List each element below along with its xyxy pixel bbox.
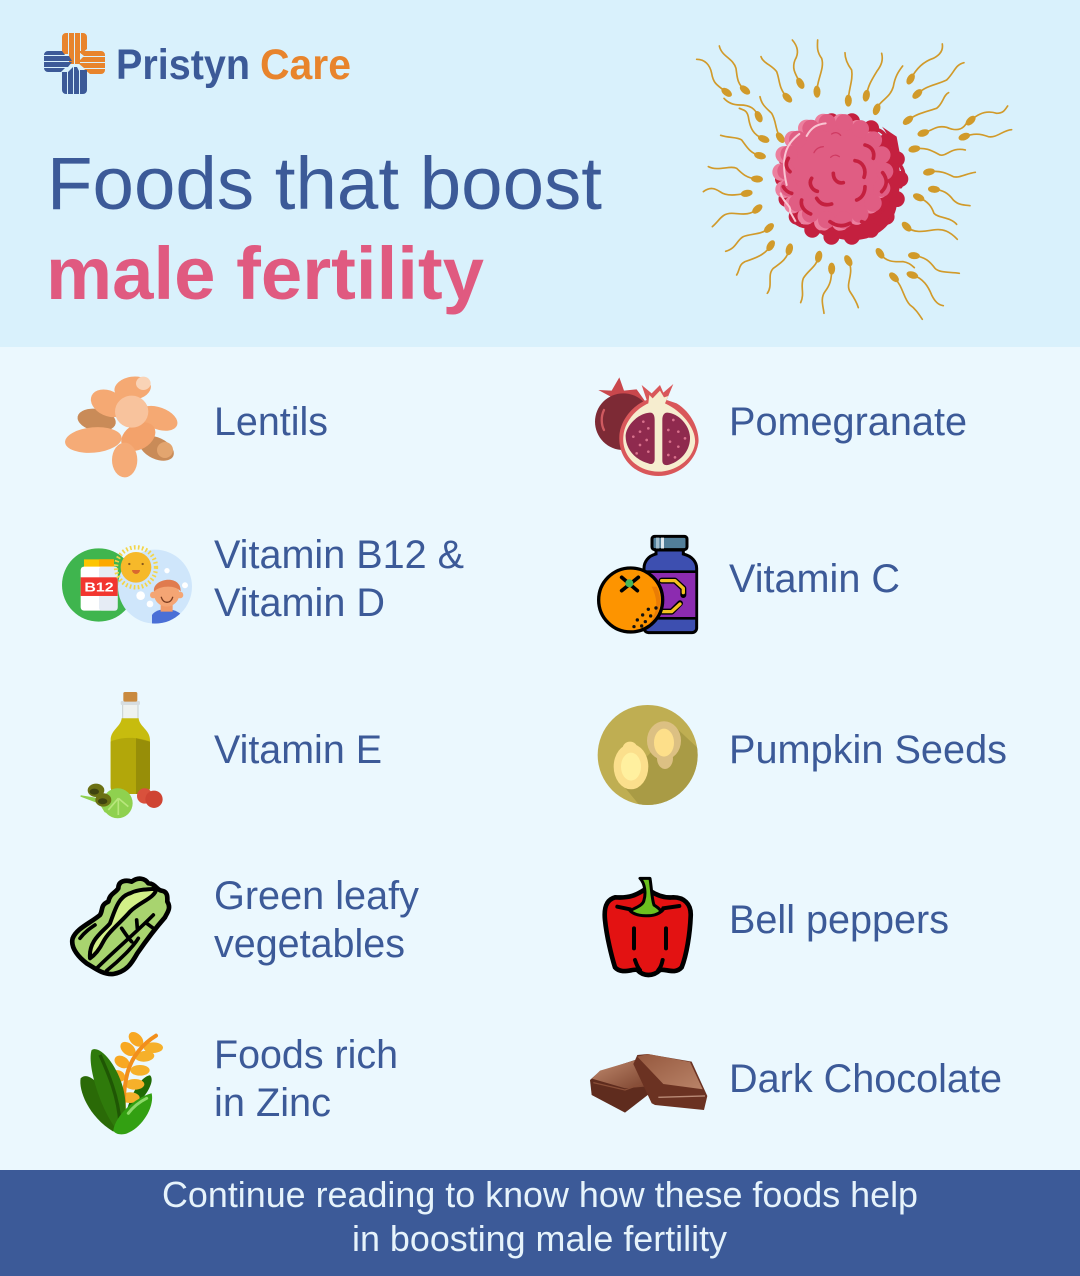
food item: Vitamin C — [599, 536, 900, 633]
icon: B12 bottle and sunshine — [62, 547, 192, 624]
label: Foods rich — [214, 1033, 398, 1077]
icon: chocolate pieces — [590, 1054, 707, 1113]
icon: cabbage — [72, 879, 169, 974]
label: Vitamin B12 & — [214, 533, 464, 577]
label: Vitamin C — [729, 557, 900, 601]
logo wordmark — [116, 41, 351, 89]
icon: pumpkin seeds — [598, 705, 703, 810]
title: Foods that boost — [47, 142, 602, 225]
label: Green leafy — [214, 874, 419, 918]
label — [214, 874, 419, 966]
label: Pomegranate — [729, 400, 967, 444]
food item: Vitamin E — [81, 692, 382, 818]
panel: header background — [0, 0, 1080, 347]
icon: pomegranate — [595, 377, 699, 476]
icon: oil bottle with olives — [81, 692, 163, 818]
label: Bell peppers — [729, 898, 949, 942]
icon: logo cross of hands — [44, 33, 105, 94]
logo: Pristyn Care — [44, 33, 351, 94]
food item: Bell peppers — [605, 878, 949, 975]
icon: red bell pepper — [605, 878, 691, 975]
label: Dark Chocolate — [729, 1057, 1002, 1101]
food item: Vitamin B12 and Vitamin D — [62, 533, 464, 625]
egg cell — [781, 120, 904, 240]
food item: Green leafy vegetables — [72, 874, 419, 974]
label: in Zinc — [214, 1081, 331, 1125]
footer text: Continue reading to know how these foods help — [162, 1174, 918, 1215]
food item: Pomegranate — [595, 377, 967, 476]
icon: vitamin C bottle and orange — [599, 536, 697, 633]
footer text: in boosting male fertility — [352, 1218, 727, 1259]
panel: food list background — [0, 347, 1080, 1170]
title: male fertility — [46, 232, 485, 315]
icon: grain plant — [80, 1029, 163, 1134]
label — [214, 533, 464, 625]
logo wordmark: Pristyn — [116, 41, 250, 89]
footer banner — [0, 1170, 1080, 1276]
label: vegetables — [214, 922, 405, 966]
label: Vitamin E — [214, 728, 382, 772]
label: Pumpkin Seeds — [729, 728, 1007, 772]
label: Vitamin D — [214, 581, 385, 625]
label: Lentils — [214, 400, 328, 444]
illustration: egg surrounded by sperm — [697, 40, 1012, 319]
footer text — [162, 1174, 918, 1259]
icon: B12 bottle and sunshine: B12 — [84, 580, 114, 594]
sperm cells — [697, 40, 1012, 319]
food item: Pumpkin Seeds — [598, 705, 1007, 810]
food item: Foods rich in Zinc — [80, 1029, 398, 1134]
title — [46, 142, 602, 315]
logo wordmark: Care — [260, 41, 351, 89]
icon: lentils — [64, 374, 181, 477]
label — [214, 1033, 398, 1125]
food item: Dark Chocolate — [590, 1054, 1002, 1113]
food item: Lentils — [64, 374, 328, 477]
